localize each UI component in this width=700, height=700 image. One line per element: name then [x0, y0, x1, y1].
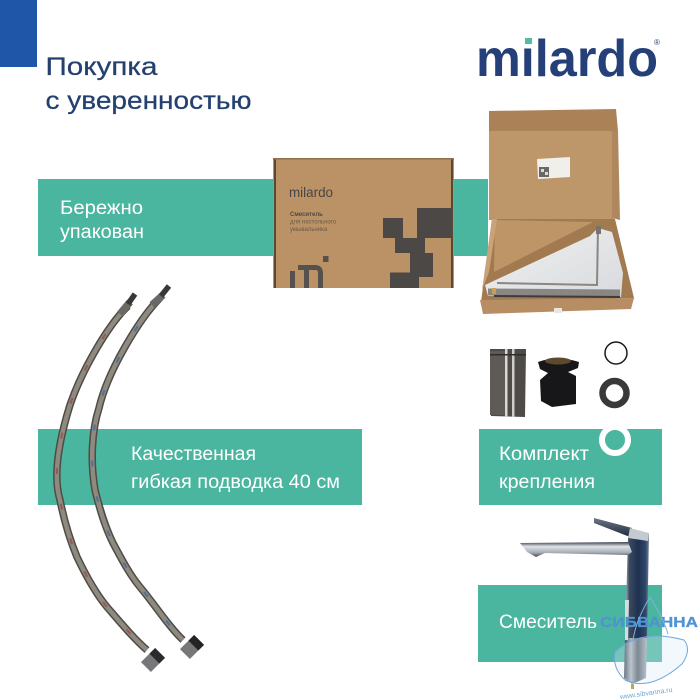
band: carefully packed: Бережно: [60, 198, 143, 219]
watermark: [600, 597, 699, 700]
title: [46, 53, 252, 115]
band: mounting kit: крепления: [499, 472, 595, 493]
closed box: для настольного: [290, 220, 337, 226]
threaded sleeve: [490, 349, 526, 417]
band: faucet: Смеситель: [499, 612, 597, 633]
hose: blue marked: [92, 286, 204, 659]
band: flexible hoses: гибкая подводка 40 см: [131, 472, 340, 493]
flexible hoses: [57, 286, 204, 672]
black plastic nut: [538, 358, 579, 407]
logo: milardo: ®: [654, 38, 660, 47]
title: с уверенностью: [46, 87, 252, 115]
white gasket: [602, 427, 628, 453]
blue corner block: [0, 0, 37, 67]
closed box: milardo: [289, 185, 333, 200]
QR label: [537, 157, 570, 179]
band: flexible hoses: Качественная: [131, 444, 256, 465]
band: mounting kit: [479, 429, 662, 505]
hose: red marked: [57, 294, 165, 672]
band: carefully packed: упакован: [60, 222, 144, 243]
dark gasket: [602, 381, 626, 405]
open box: [480, 109, 634, 314]
nut: [141, 648, 165, 672]
mounting kit parts: [490, 342, 628, 453]
closed box: умывальника: [290, 227, 328, 233]
faucet: [520, 518, 649, 689]
logo: milardo: milardo: [476, 30, 658, 88]
band: mounting kit: Комплект: [499, 444, 589, 465]
nut: [180, 635, 204, 659]
closed box: Смеситель: [290, 212, 323, 218]
small o-ring: [605, 342, 627, 364]
band: flexible hoses: [38, 429, 362, 505]
band: carefully packed: [38, 179, 488, 256]
closed box: [273, 158, 454, 288]
watermark: СИБВАННА: [600, 615, 699, 631]
title: Покупка: [46, 53, 158, 81]
band: faucet: [478, 585, 662, 662]
